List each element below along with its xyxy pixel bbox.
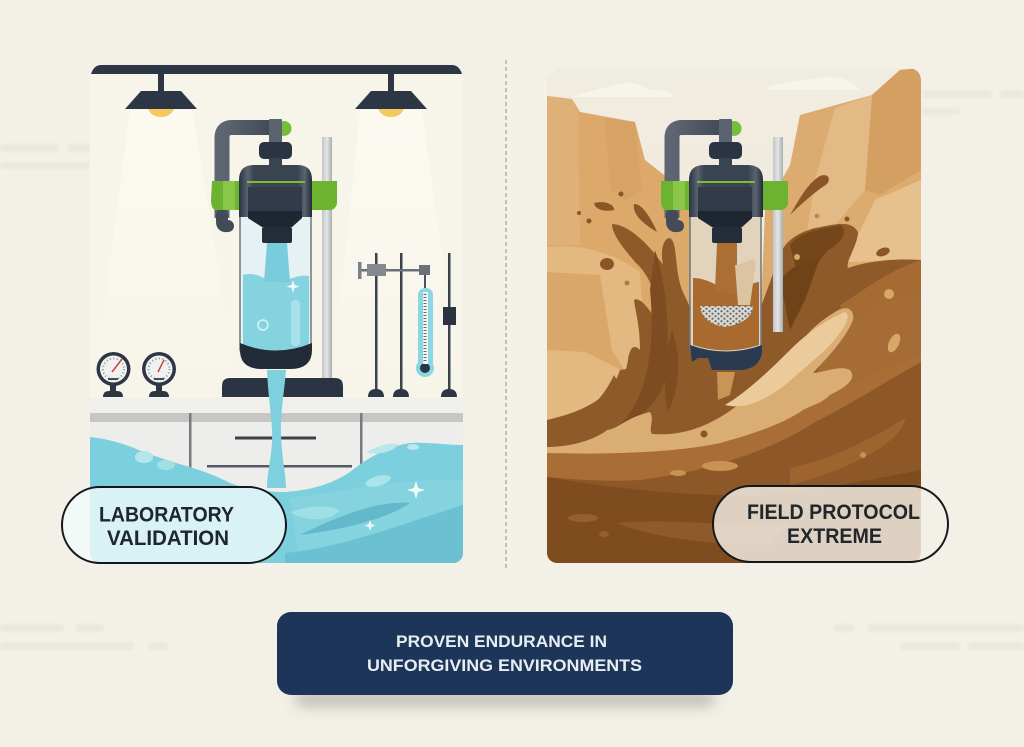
ring stands and thermometer (358, 253, 457, 397)
banner shadow (295, 692, 715, 706)
mud droplets (577, 175, 903, 438)
lab counter (90, 413, 463, 492)
filter unit: lab (211, 119, 343, 397)
pressure gauges (96, 352, 176, 397)
left mud swoosh (598, 224, 692, 424)
banner: UNFORGIVING ENVIRONMENTS (367, 656, 642, 675)
banner: PROVEN ENDURANCE IN (396, 632, 607, 651)
stand base (222, 378, 343, 397)
green clamp band (661, 181, 788, 210)
light cones (92, 110, 462, 400)
panel: field protocol extreme (547, 68, 948, 563)
foam (547, 308, 853, 454)
left cliff (547, 96, 690, 420)
label: laboratory validation (62, 487, 286, 563)
lower mud layers (547, 355, 921, 563)
field sky (639, 131, 796, 272)
label: field protocol extreme: FIELD PROTOCOL (747, 501, 920, 524)
glass tube (690, 205, 761, 355)
right cliff (762, 68, 921, 305)
green clamp band (211, 181, 337, 210)
ceiling bar and lamps (91, 65, 462, 117)
outflow stream (267, 370, 286, 488)
water pool (90, 437, 463, 563)
right wave bands (783, 225, 921, 386)
inlet pipe (222, 128, 270, 218)
center divider (505, 60, 507, 571)
lab background (90, 144, 92, 152)
muddy outflow (717, 372, 735, 400)
clouds (572, 77, 860, 97)
glass tube (240, 205, 311, 355)
faint background dashes (0, 90, 1024, 650)
lower cap (690, 345, 762, 370)
lower cap (240, 343, 312, 369)
inlet pipe (672, 128, 720, 218)
filter mesh (700, 306, 753, 327)
mud wave base (547, 224, 921, 563)
upper cap (239, 165, 312, 217)
support rod (322, 137, 332, 380)
label: laboratory validation: VALIDATION (107, 527, 229, 550)
label: field protocol extreme: EXTREME (787, 525, 882, 548)
field filter unit (661, 119, 788, 400)
banner (277, 612, 733, 695)
support rod (773, 137, 783, 332)
panel: laboratory validation (62, 65, 463, 563)
upper cap (689, 165, 763, 217)
label: field protocol extreme (713, 486, 948, 562)
label: laboratory validation: LABORATORY (99, 504, 234, 526)
